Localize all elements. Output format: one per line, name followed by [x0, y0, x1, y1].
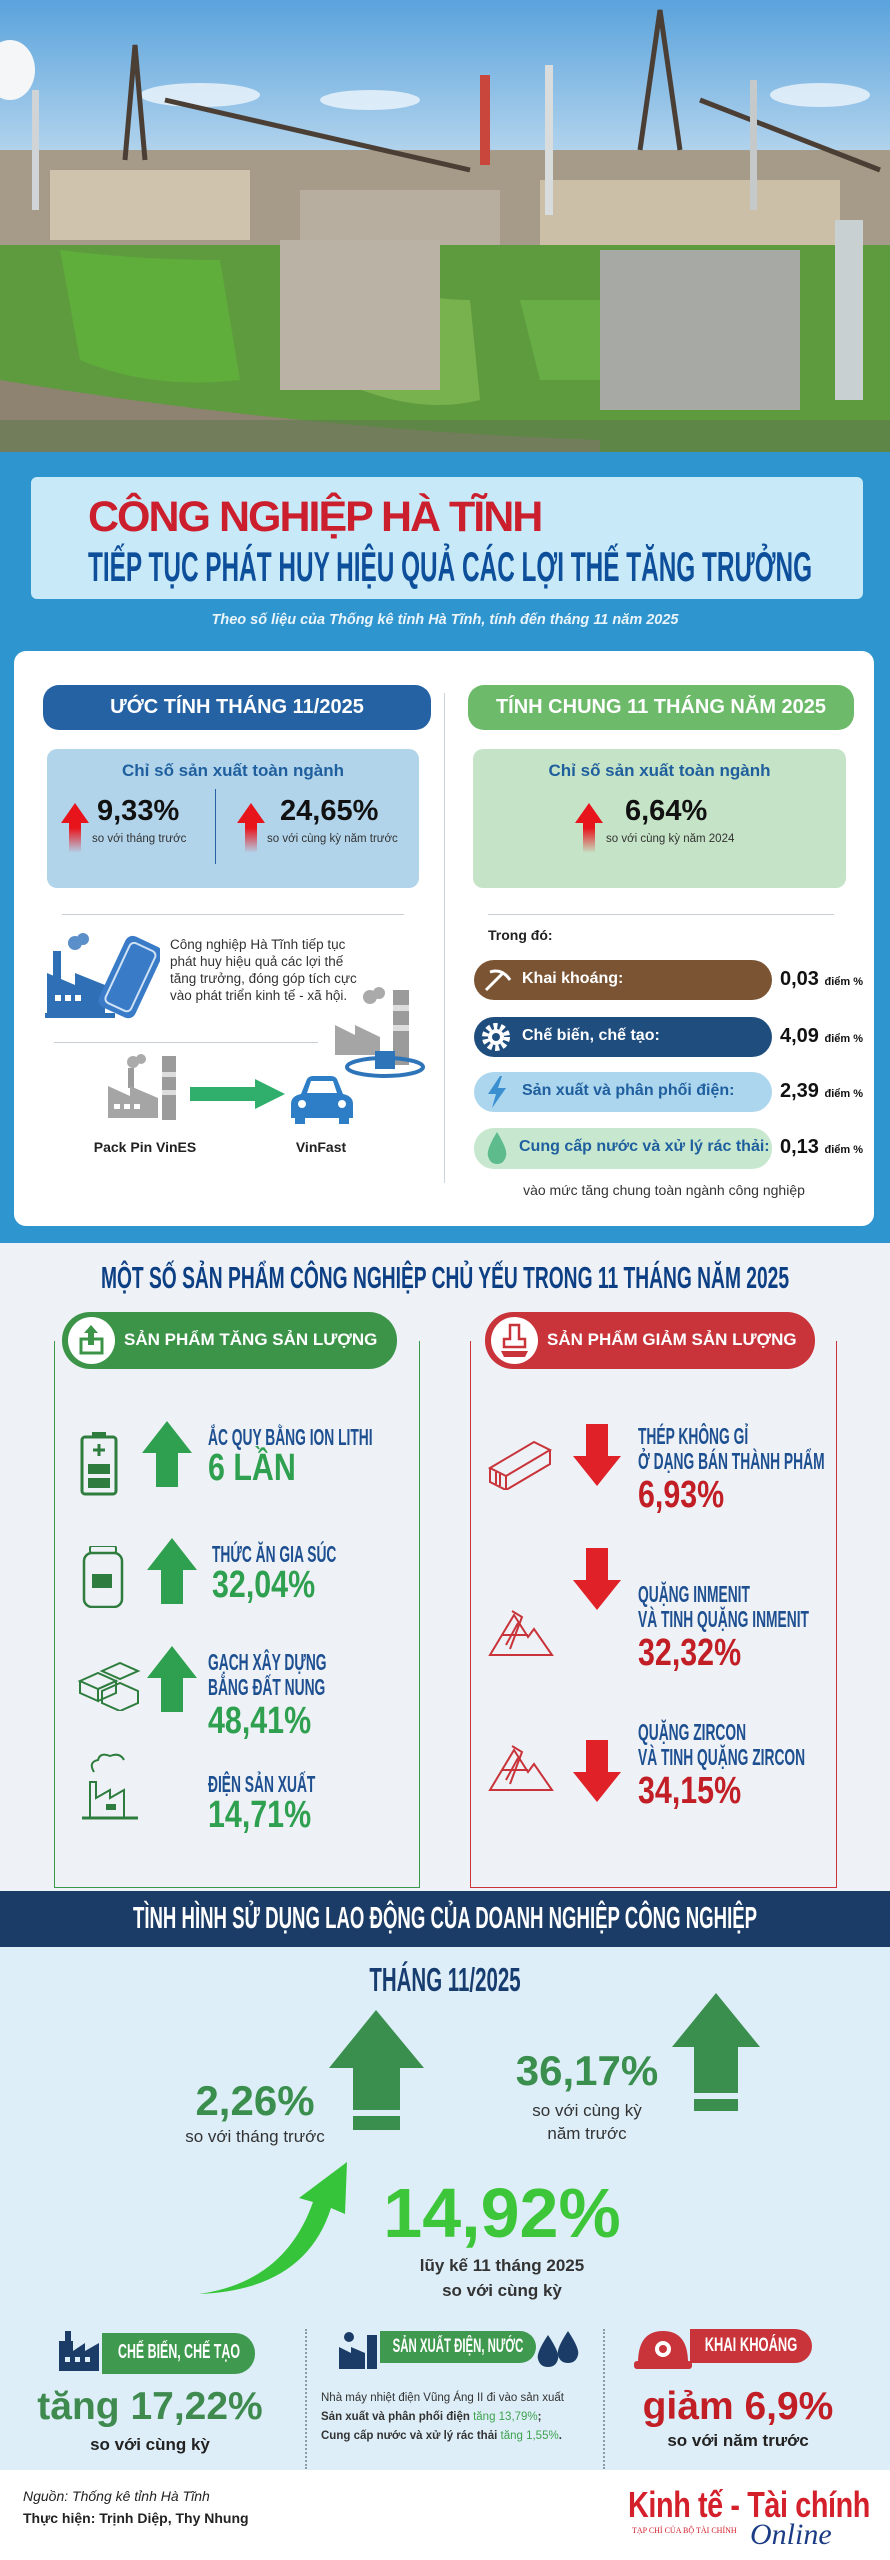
column: mining — [634, 2329, 833, 2450]
stat 14,92% — [383, 2174, 621, 2300]
item: battery: 6 LẦN — [208, 1447, 296, 1489]
bar: Sản xuất và phân phối điện: Sản xuất và phân phối điện: — [522, 1082, 734, 1099]
right index box: Chỉ số sản xuất toàn ngành — [549, 761, 770, 780]
bar: Cung cấp nước: 0,13 điểm % — [780, 1136, 863, 1158]
section 3 heading band: TÌNH HÌNH SỬ DỤNG LAO ĐỘNG CỦA DOANH NGHIỆP CÔNG NGHIỆP — [133, 1900, 757, 1935]
item: stainless steel — [488, 1423, 825, 1516]
bar: Chế biến, chế tạo — [474, 1017, 863, 1057]
panel: labor — [0, 1947, 890, 2470]
stat 2,26% — [185, 2077, 325, 2146]
logo: Kinh te - Tai chinh Online: Kinh tế - Tài chính — [628, 2484, 870, 2525]
left header pill: ƯỚC TÍNH THÁNG 11/2025 — [110, 696, 364, 718]
arrow: green — [190, 1079, 285, 1109]
left header pill — [43, 685, 431, 730]
logo: Kinh te - Tai chinh Online: Online — [750, 2518, 832, 2551]
icon: grey factory VinES — [108, 1054, 176, 1120]
header pill — [62, 1312, 397, 1369]
stat 9,33%: so với tháng trước — [92, 833, 186, 845]
stat 6,64%: 6,64% — [625, 795, 707, 827]
stat 9,33% — [61, 795, 186, 852]
bar: Cung cấp nước: Cung cấp nước và xử lý rác thải: — [519, 1138, 770, 1155]
stat 36,17%: so với cùng kỳ — [532, 2101, 642, 2120]
column: mining: so với năm trước — [667, 2431, 809, 2450]
item: zircon ore — [488, 1719, 805, 1812]
section 2 background — [0, 1243, 890, 1893]
bar: Sản xuất và phân phối điện — [474, 1072, 863, 1112]
item: battery — [80, 1421, 373, 1496]
right header pill: TÍNH CHUNG 11 THÁNG NĂM 2025 — [496, 696, 826, 718]
left index box — [47, 749, 419, 888]
item: bricks: 48,41% — [208, 1700, 311, 1742]
item: zircon ore: 34,15% — [638, 1770, 741, 1812]
subtitle: Theo số liệu của Thống kê tỉnh Hà Tĩnh, tính đến tháng 11 năm 2025 — [211, 612, 678, 628]
label: Trong đó: Trong đó: — [488, 927, 553, 943]
panel: increased products — [54, 1312, 420, 1888]
bar: Khai khoáng: Khai khoáng: — [522, 970, 623, 987]
column: mining: KHAI KHOÁNG — [705, 2335, 797, 2356]
item: stainless steel: Ở DẠNG BÁN THÀNH PHẨM — [638, 1448, 825, 1474]
stat 36,17%: 36,17% — [516, 2047, 658, 2094]
item: bricks — [78, 1646, 327, 1742]
logo: Kinh te - Tai chinh Online: TẠP CHÍ CỦA BỘ TÀI CHÍNH — [632, 2526, 737, 2535]
blue background section 1 — [0, 452, 890, 1245]
item: electricity: 14,71% — [208, 1794, 311, 1836]
column: electricity and water: Nhà máy nhiệt điện Vũng Áng II đi vào sản xuất — [321, 2392, 564, 2404]
text: description: Công nghiệp Hà Tĩnh tiếp tục phát huy hiệu quả các lợi thế tăng trưởng, đóng góp tích cực vào phát triển kinh tế - xã hội. — [170, 937, 357, 1003]
hero photo: steel plant — [0, 0, 890, 452]
stat 36,17%: năm trước — [547, 2124, 627, 2143]
curved arrow — [200, 2162, 347, 2294]
header pill — [485, 1312, 815, 1369]
stat 14,92%: 14,92% — [383, 2174, 621, 2252]
header pill: SẢN PHẨM GIẢM SẢN LƯỢNG — [547, 1330, 797, 1349]
section 3 heading band — [0, 1891, 890, 1947]
panel: decreased products — [470, 1312, 837, 1888]
column: processing: so với cùng kỳ — [90, 2435, 210, 2454]
column: processing: CHẾ BIẾN, CHẾ TẠO — [118, 2341, 240, 2363]
logo: Kinh te - Tai chinh Online — [628, 2484, 870, 2551]
label: VinFast: VinFast — [296, 1139, 346, 1155]
item: battery: ẮC QUY BẰNG ION LITHI — [208, 1424, 373, 1450]
bar: Chế biến, chế tạo: 4,09 điểm % — [780, 1025, 863, 1047]
bar: Sản xuất và phân phối điện: 2,39 điểm % — [780, 1080, 863, 1102]
right header pill — [468, 685, 854, 730]
arrow up 1 — [329, 2010, 424, 2130]
item: ilmenite ore — [488, 1548, 809, 1674]
item: electricity — [82, 1754, 316, 1836]
stat 24,65%: 24,65% — [280, 795, 378, 827]
item: animal feed — [82, 1538, 336, 1608]
item: bricks: GẠCH XÂY DỰNG — [208, 1649, 327, 1675]
item: zircon ore: VÀ TINH QUẶNG ZIRCON — [638, 1744, 805, 1770]
column: electricity and water: Sản xuất và phân phối điện tăng 13,79%; — [321, 2411, 542, 2423]
bar: Chế biến, chế tạo: Chế biến, chế tạo: — [522, 1027, 660, 1044]
bar: Khai khoáng — [474, 960, 863, 1000]
arrow up 2 — [672, 1993, 760, 2111]
footnote: vào mức tăng chung toàn ngành công nghiệp — [523, 1182, 805, 1198]
item: bricks: BẰNG ĐẤT NUNG — [208, 1674, 325, 1700]
column: electricity and water: Cung cấp nước và xử lý rác thải tăng 1,55%. — [321, 2430, 562, 2442]
section 2 heading: MỘT SỐ SẢN PHẨM CÔNG NGHIỆP CHỦ YẾU TRONG 11 THÁNG NĂM 2025 — [101, 1260, 789, 1295]
icon: plant with water — [335, 987, 425, 1078]
stat 9,33%: 9,33% — [97, 795, 179, 827]
item: ilmenite ore: VÀ TINH QUẶNG INMENIT — [638, 1606, 809, 1632]
right index box — [473, 749, 846, 888]
icon: factory with battery — [45, 933, 160, 1018]
stat 6,64%: so với cùng kỳ năm 2024 — [606, 833, 734, 845]
stat 36,17% — [516, 2047, 658, 2143]
item: animal feed: 32,04% — [212, 1564, 315, 1606]
stat 24,65%: so với cùng kỳ năm trước — [267, 833, 398, 845]
stat 24,65% — [237, 795, 398, 852]
footer: source credits: Nguồn: Thống kê tỉnh Hà Tĩnh — [23, 2488, 210, 2504]
title line 2: TIẾP TỤC PHÁT HUY HIỆU QUẢ CÁC LỢI THẾ TĂNG TRƯỞNG — [88, 543, 812, 590]
header pill: SẢN PHẨM TĂNG SẢN LƯỢNG — [124, 1330, 377, 1349]
left index box: Chỉ số sản xuất toàn ngành — [122, 761, 344, 780]
stat 2,26%: 2,26% — [195, 2077, 315, 2124]
item: ilmenite ore: QUẶNG INMENIT — [638, 1581, 750, 1607]
footer: source credits — [23, 2488, 249, 2526]
bar: Cung cấp nước — [474, 1128, 863, 1169]
column: electricity and water: SẢN XUẤT ĐIỆN, NƯỚC — [393, 2336, 523, 2357]
bar: Khai khoáng: 0,03 điểm % — [780, 968, 863, 990]
item: animal feed: THỨC ĂN GIA SÚC — [212, 1541, 336, 1567]
footer: source credits: Thực hiện: Trịnh Diệp, Thy Nhung — [23, 2510, 249, 2526]
stat 14,92%: lũy kế 11 tháng 2025 — [420, 2256, 584, 2275]
title box — [31, 477, 863, 599]
column: mining: giảm 6,9% — [643, 2385, 833, 2428]
panel: production index — [14, 651, 874, 1226]
item: zircon ore: QUẶNG ZIRCON — [638, 1719, 746, 1745]
column: processing — [37, 2331, 263, 2454]
item: stainless steel: 6,93% — [638, 1474, 724, 1516]
item: stainless steel: THÉP KHÔNG GỈ — [638, 1423, 748, 1449]
label: Pack Pin VinES: Pack Pin VinES — [94, 1139, 196, 1155]
item: ilmenite ore: 32,32% — [638, 1632, 741, 1674]
title line 1: CÔNG NGHIỆP HÀ TĨNH — [88, 493, 541, 541]
column: electricity and water — [321, 2331, 578, 2442]
stat 2,26%: so với tháng trước — [185, 2127, 325, 2146]
subheading month: THÁNG 11/2025 — [369, 1961, 521, 1998]
column: processing: tăng 17,22% — [37, 2385, 263, 2428]
stat 14,92%: so với cùng kỳ — [442, 2281, 562, 2300]
stat 6,64% — [575, 795, 734, 852]
item: electricity: ĐIỆN SẢN XUẤT — [208, 1771, 315, 1797]
icon: car — [291, 1076, 353, 1124]
